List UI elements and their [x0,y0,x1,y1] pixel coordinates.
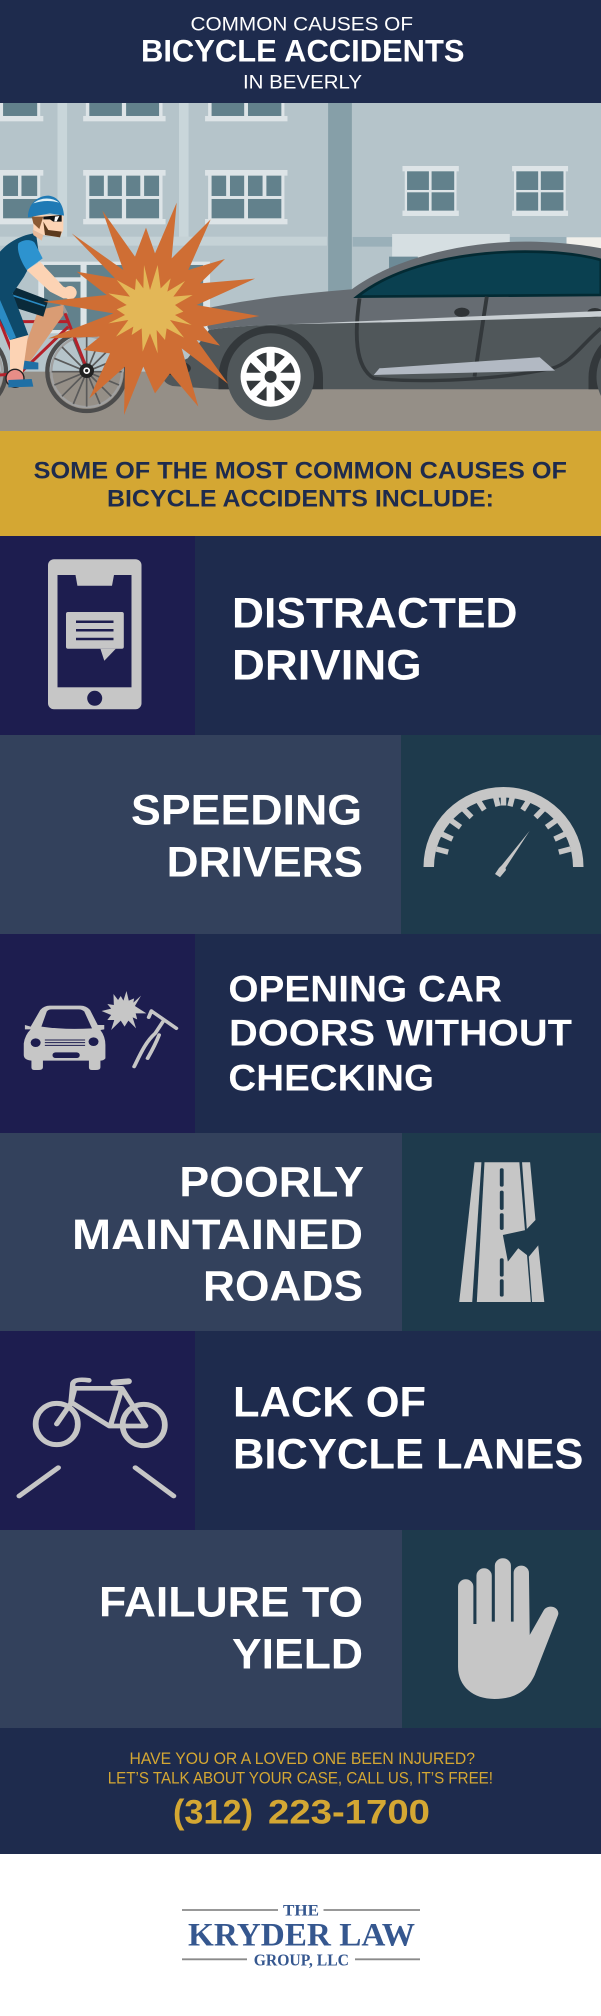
cyclist on red bicycle [0,196,126,411]
label: distracted driving: DRIVING [232,641,422,689]
icon: speedometer [424,787,584,877]
title line 3: IN BEVERLY [243,71,362,93]
label: opening car doors without checking: CHECKING [228,1057,434,1098]
panel: distracted driving [0,536,601,735]
panel: poorly maintained roads [0,1133,601,1331]
label: lack of bicycle lanes: BICYCLE LANES [233,1431,583,1479]
label: speeding drivers: SPEEDING [131,787,362,835]
title line 2: BICYCLE ACCIDENTS [141,33,464,69]
phone number [173,1793,430,1831]
label: distracted driving: DISTRACTED [232,589,518,637]
label: lack of bicycle lanes: LACK OF [233,1379,426,1427]
panel: failure to yield [0,1530,601,1728]
label: distracted driving [232,589,518,689]
icon: car door striking bicycle [24,991,176,1070]
icon: bicycle between lane lines [19,1380,174,1496]
intro heading: BICYCLE ACCIDENTS INCLUDE: [107,487,494,513]
icon: raised hand [458,1558,558,1699]
car wheels [218,326,601,420]
label: opening car doors without checking: DOORS WITHOUT [229,1013,573,1054]
label: opening car doors without checking [228,968,573,1098]
car: dark grey sedan [162,242,601,389]
label: poorly maintained roads: MAINTAINED [72,1211,363,1259]
panel: speeding drivers [0,735,601,934]
logo: The Kryder Law Group, LLC [182,1903,420,1969]
label: failure to yield: FAILURE TO [99,1579,363,1627]
icon: damaged road [459,1162,544,1302]
label: failure to yield [99,1579,363,1679]
label: speeding drivers: DRIVERS [167,839,363,887]
intro heading [34,459,567,513]
logo: The Kryder Law Group, LLC: GROUP, LLC [254,1950,349,1969]
icon: smartphone with message [48,559,142,709]
logo: The Kryder Law Group, LLC: KRYDER LAW [188,1918,415,1954]
panel: opening car doors [0,934,601,1133]
call to action text: HAVE YOU OR A LOVED ONE BEEN INJURED? [130,1750,475,1768]
explosion burst [43,203,259,415]
background: buildings and road [0,102,601,436]
label: poorly maintained roads: POORLY [179,1159,364,1207]
call to action panel [0,1728,601,1854]
label: failure to yield: YIELD [232,1631,363,1679]
phone number: 223-1700 [268,1793,430,1831]
label: poorly maintained roads: ROADS [203,1263,363,1311]
label: opening car doors without checking: OPENING CAR [228,968,502,1009]
intro heading: SOME OF THE MOST COMMON CAUSES OF [34,459,567,485]
label: lack of bicycle lanes [233,1379,583,1479]
phone number: (312) [173,1793,253,1831]
intro banner [0,431,601,536]
label: speeding drivers [131,787,363,887]
logo: The Kryder Law Group, LLC: THE [283,1903,319,1920]
panel: lack of bicycle lanes [0,1331,601,1530]
label: poorly maintained roads [72,1159,364,1311]
call to action text [108,1750,493,1787]
call to action text: LET’S TALK ABOUT YOUR CASE, CALL US, IT’S FREE! [108,1769,493,1787]
title line 1: COMMON CAUSES OF [190,14,413,36]
illustration: cyclist hit by car in front of buildings [0,102,601,436]
title banner [0,0,601,103]
